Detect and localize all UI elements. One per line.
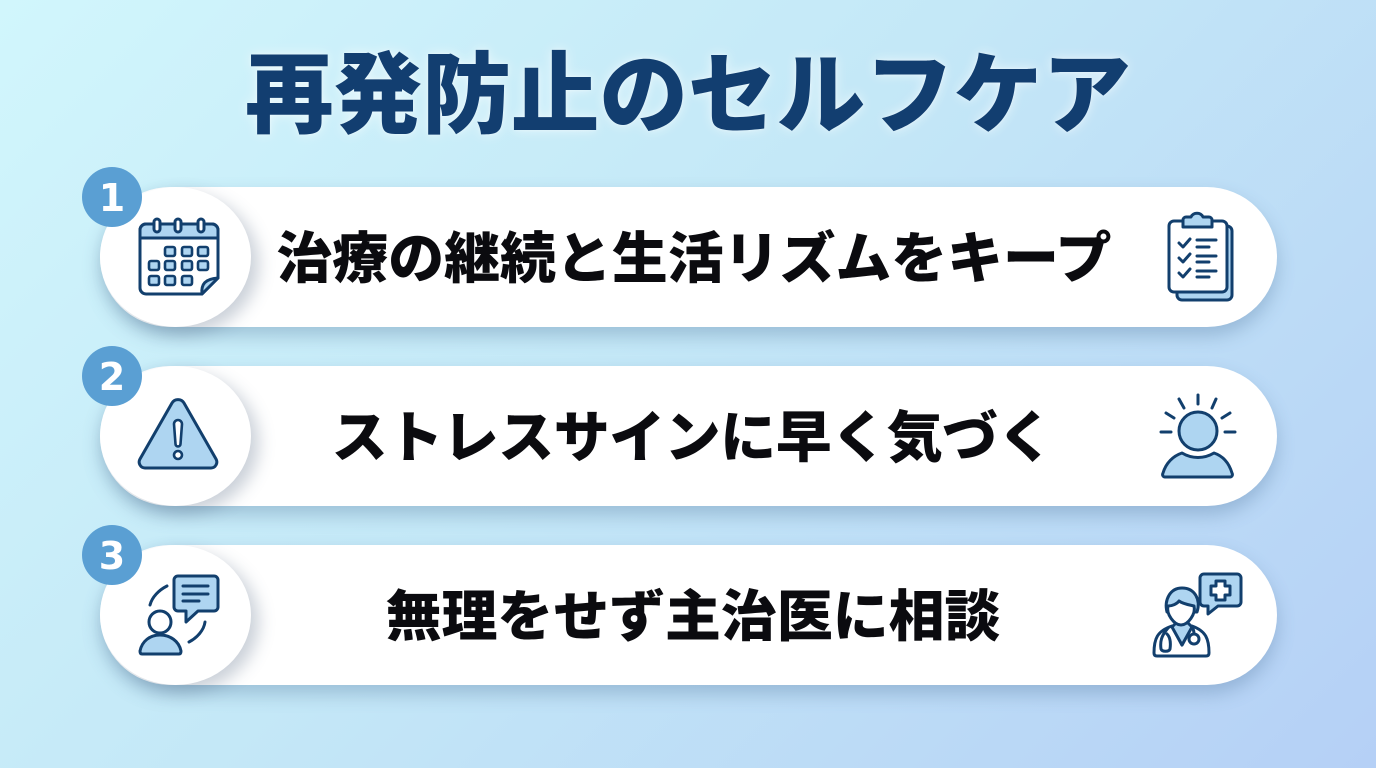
step 1 text: 治療の継続と生活リズムをキープ <box>276 227 1112 290</box>
icon: person with radiating lines <box>1160 394 1236 478</box>
pill background 1 <box>100 187 1277 327</box>
number badge 3: 3 <box>99 534 125 578</box>
pill background 2 <box>100 366 1277 506</box>
icon circle 3 <box>100 545 251 685</box>
panel: step 3 <box>82 525 1284 704</box>
panel: step 1 <box>82 167 1284 347</box>
number badge 3 <box>82 525 142 585</box>
number badge 2: 2 <box>99 355 125 399</box>
number badge 2 <box>82 346 142 406</box>
icon: clipboard checklist <box>1168 212 1234 302</box>
number badge 1: 1 <box>99 176 125 220</box>
title: 再発防止のセルフケア <box>245 46 1131 145</box>
panel: step 2 <box>82 346 1284 526</box>
number badge 1 <box>82 167 142 227</box>
icon: doctor with medical speech bubble <box>1152 572 1242 658</box>
pill background 3 <box>100 545 1277 685</box>
step 3 text: 無理をせず主治医に相談 <box>386 585 1000 648</box>
icon: calendar <box>138 218 220 296</box>
icon: person with speech bubble <box>138 574 220 656</box>
icon: warning triangle <box>138 398 218 470</box>
icon circle 2 <box>100 366 251 506</box>
icon circle 1 <box>100 187 251 327</box>
step 2 text: ストレスサインに早く気づく <box>332 406 1053 469</box>
